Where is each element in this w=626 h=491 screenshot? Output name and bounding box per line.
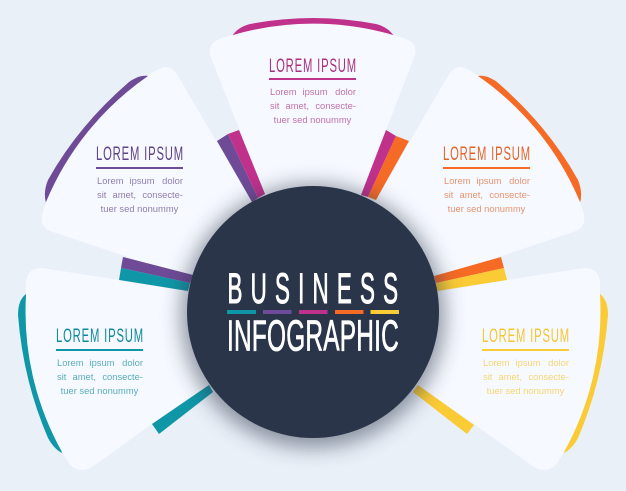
accent arc: purple (45, 76, 148, 203)
text block: top (269, 56, 357, 125)
text block: upper left: Lorem (97, 175, 124, 186)
text block: upper right (443, 144, 531, 214)
text block: top: ipsum (302, 86, 328, 97)
text block: upper right: sit (444, 189, 454, 200)
title colour bars (227, 310, 399, 314)
text block: upper left: LOREM IPSUM (96, 144, 184, 165)
text block: lower left: LOREM IPSUM (56, 326, 144, 347)
circle shadow (181, 184, 445, 448)
panel: upper right (313, 67, 584, 312)
title: BUSINESS (228, 265, 406, 313)
text block: lower right: dolor (548, 357, 569, 368)
text block: top: consecte- (315, 100, 356, 111)
accent arc: magenta (232, 18, 394, 36)
connector: magenta and orange (361, 130, 409, 200)
text block: top: Lorem (270, 86, 297, 97)
text block: upper right: dolor (509, 175, 530, 186)
connector: purple and teal (119, 257, 193, 291)
text block: upper left: sit (97, 189, 107, 200)
connector: yellow (413, 385, 474, 434)
text block: upper right: amet, (460, 189, 483, 200)
text block: upper left (96, 144, 184, 214)
accent arc: teal (18, 294, 62, 453)
text block: lower right: LOREM IPSUM (482, 326, 570, 347)
text block: lower left: sit (57, 371, 67, 382)
accent arc: yellow (564, 294, 608, 453)
panel: lower left (26, 268, 313, 470)
text block: lower right: amet, (498, 371, 522, 382)
text block: upper left: tuer sed nonummy (101, 203, 179, 214)
accent arc: orange (478, 76, 581, 203)
text block: lower left: Lorem (57, 357, 84, 368)
text block: top: LOREM IPSUM (269, 56, 357, 77)
text block: top: dolor (335, 86, 356, 97)
text block: lower right: consecte- (528, 371, 569, 382)
text block: lower left: dolor (122, 357, 143, 368)
text block: lower right: tuer sed nonummy (487, 385, 565, 396)
text block: lower left: amet, (72, 371, 96, 382)
text block: upper right: Lorem (444, 175, 471, 186)
text block: lower left: consecte- (102, 371, 143, 382)
text block: upper right: ipsum (476, 175, 502, 186)
text block: upper left: ipsum (130, 175, 155, 186)
panel: upper left (42, 67, 313, 312)
text block: lower right (482, 326, 570, 396)
title: INFOGRAPHIC (227, 311, 399, 360)
center circle (187, 186, 439, 438)
text block: upper left: consecte- (142, 189, 183, 200)
text block: top: sit (270, 100, 280, 111)
text block: lower left: tuer sed nonummy (61, 385, 139, 396)
text block: top: amet, (286, 100, 309, 111)
text block: lower left (56, 326, 144, 396)
connector: purple and magenta (217, 130, 265, 202)
text block: upper left: amet, (112, 189, 136, 200)
panel: top (210, 24, 416, 312)
text block: lower right: sit (483, 371, 493, 382)
text block: lower left: ipsum (90, 357, 115, 368)
title (227, 265, 406, 360)
text block: upper right: LOREM IPSUM (443, 144, 531, 165)
text block: top: tuer sed nonummy (274, 114, 352, 125)
panel: lower right (313, 268, 600, 470)
text block: upper right: tuer sed nonummy (448, 203, 526, 214)
text block: lower right: Lorem (483, 357, 510, 368)
connector: teal (152, 385, 213, 434)
connector: orange and yellow (434, 257, 507, 291)
text block: upper left: dolor (162, 175, 183, 186)
text block: upper right: consecte- (489, 189, 530, 200)
text block: lower right: ipsum (516, 357, 541, 368)
